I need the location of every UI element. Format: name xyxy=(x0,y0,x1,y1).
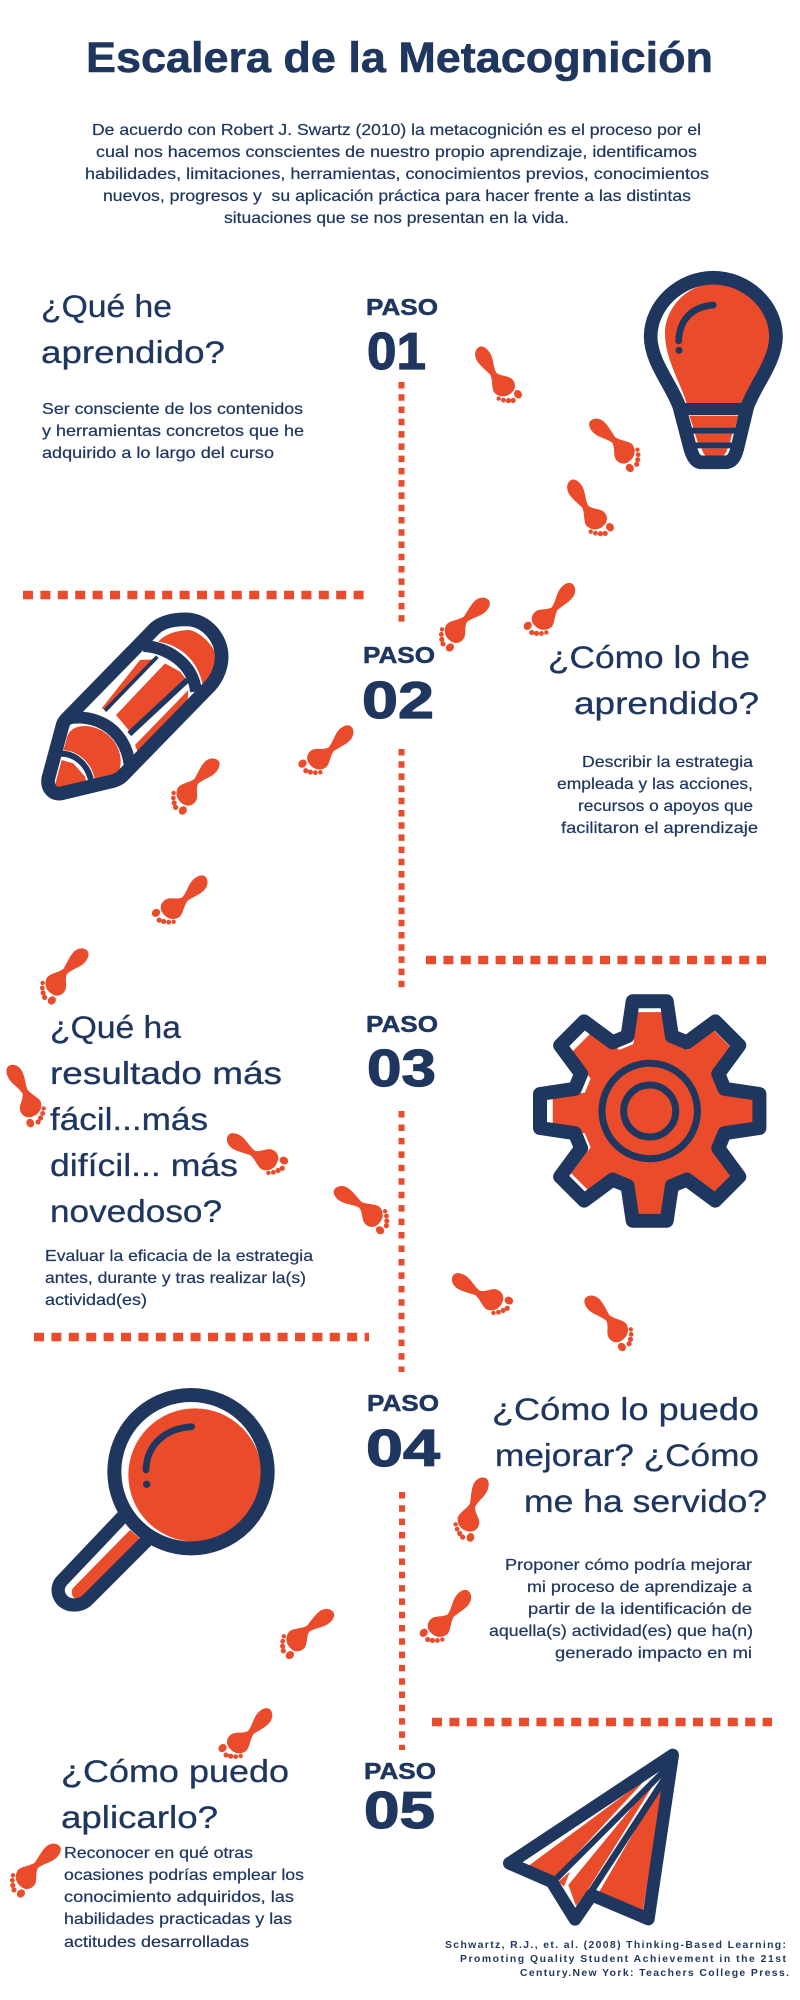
text block: paso 02 description: Describir la estrategia xyxy=(582,754,753,771)
step label 05: PASO xyxy=(364,1758,436,1784)
icon: footprint 4 xyxy=(521,578,584,643)
icon: footprint 15 xyxy=(449,1473,494,1543)
step label 02 xyxy=(362,642,435,730)
intro paragraph: nuevos, progresos y su aplicación práctica para hacer frente a las distintas xyxy=(103,188,691,205)
heading: paso 03 question: resultado más xyxy=(50,1055,282,1091)
panel: paso 04 xyxy=(58,1390,767,1662)
text block: paso 05 description: habilidades practicadas y las xyxy=(64,1911,292,1928)
text block: paso 04 description xyxy=(489,1557,753,1662)
heading: paso 04 question: ¿Cómo lo puedo xyxy=(492,1391,759,1427)
heading: paso 02 question: aprendido? xyxy=(574,685,759,721)
icon: footprint 3 xyxy=(558,475,616,543)
icon: footprint 19 xyxy=(3,1835,66,1900)
text block: paso 02 description xyxy=(557,754,758,837)
panel: paso 03 xyxy=(45,1001,759,1309)
icon: gear xyxy=(540,1001,759,1221)
text block: paso 03 description: actividad(es) xyxy=(45,1292,147,1309)
icon: footprint 18 xyxy=(216,1703,281,1766)
icon: footprint 10 xyxy=(1,1059,51,1129)
heading: paso 03 question: difícil... más xyxy=(50,1147,238,1183)
heading: paso 04 question xyxy=(492,1391,767,1519)
heading: paso 04 question: mejorar? ¿Cómo xyxy=(495,1437,759,1473)
icon: paper plane xyxy=(509,1755,673,1919)
heading: paso 02 question xyxy=(548,639,759,721)
icon: footprint 17 xyxy=(273,1600,339,1661)
heading: paso 03 question: ¿Qué ha xyxy=(50,1009,182,1045)
step label 05: 05 xyxy=(364,1782,435,1840)
step label 04: 04 xyxy=(366,1420,440,1478)
title: Escalera de la Metacognición xyxy=(86,34,713,82)
text block: paso 01 description: adquirido a lo largo del curso xyxy=(42,445,274,462)
step label 01 xyxy=(366,294,438,381)
step label 04 xyxy=(366,1390,440,1478)
intro paragraph: situaciones que se nos presentan en la vida. xyxy=(224,210,569,227)
citation: Century.New York: Teachers College Press. xyxy=(520,1968,789,1979)
step label 03: PASO xyxy=(366,1011,438,1037)
text block: paso 04 description: Proponer cómo podría mejorar xyxy=(505,1557,752,1574)
heading: paso 02 question: ¿Cómo lo he xyxy=(548,639,750,675)
intro paragraph: cual nos hacemos conscientes de nuestro propio aprendizaje, identificamos xyxy=(96,144,697,161)
footprints trail xyxy=(1,342,648,1900)
text block: paso 04 description: aquella(s) actividad(es) que ha(n) xyxy=(489,1623,753,1640)
heading: paso 01 question xyxy=(41,288,225,370)
text block: paso 04 description: mi proceso de aprendizaje a xyxy=(527,1579,752,1596)
step label 03 xyxy=(366,1011,438,1098)
citation xyxy=(445,1940,789,1979)
icon: footprint 6 xyxy=(296,720,362,782)
text block: paso 05 description: Reconocer en qué otras xyxy=(64,1845,253,1862)
citation: Schwartz, R.J., et. al. (2008) Thinking-Based Learning: xyxy=(445,1940,786,1951)
text block: paso 02 description: facilitaron el aprendizaje xyxy=(561,820,758,837)
text block: paso 05 description: conocimiento adquiridos, las xyxy=(64,1889,294,1906)
icon: footprint 8 xyxy=(150,870,215,932)
step label 02: 02 xyxy=(362,672,434,730)
text block: paso 05 description: ocasiones podrías emplear los xyxy=(64,1867,304,1884)
intro paragraph: habilidades, limitaciones, herramientas, conocimientos previos, conocimientos xyxy=(85,166,709,183)
heading: paso 05 question: aplicarlo? xyxy=(61,1799,218,1835)
step label 03: 03 xyxy=(367,1040,436,1098)
step label 02: PASO xyxy=(363,642,435,668)
heading: paso 04 question: me ha servido? xyxy=(524,1483,767,1519)
text block: paso 05 description: actitudes desarrolladas xyxy=(64,1934,249,1951)
citation: Promoting Quality Student Achievement in the 21st xyxy=(460,1954,787,1965)
icon: footprint 11 xyxy=(221,1128,290,1181)
heading: paso 05 question xyxy=(61,1753,289,1835)
step label 01: PASO xyxy=(366,294,438,320)
step label 04: PASO xyxy=(367,1390,439,1416)
text block: paso 02 description: empleada y las acciones, xyxy=(557,776,753,793)
text block: paso 03 description xyxy=(45,1248,313,1309)
step label 05 xyxy=(364,1758,436,1840)
heading: paso 03 question: novedoso? xyxy=(50,1193,222,1229)
icon: pencil xyxy=(48,619,222,794)
heading: paso 01 question: aprendido? xyxy=(41,334,225,370)
icon: footprint 16 xyxy=(417,1585,480,1650)
heading: paso 03 question xyxy=(50,1009,282,1229)
panel: paso 05 xyxy=(61,1753,789,1979)
text block: paso 04 description: generado impacto en mi xyxy=(555,1645,752,1662)
text block: paso 02 description: recursos o apoyos que xyxy=(578,798,753,815)
icon: footprint 13 xyxy=(446,1268,515,1321)
heading: paso 05 question: ¿Cómo puedo xyxy=(61,1753,289,1789)
text block: paso 03 description: antes, durante y tras realizar la(s) xyxy=(45,1270,306,1287)
text block: paso 04 description: partir de la identificación de xyxy=(528,1601,752,1618)
panel: paso 02 xyxy=(48,619,759,837)
icon: light bulb xyxy=(651,278,776,462)
heading: paso 01 question: ¿Qué he xyxy=(41,288,172,324)
text block: paso 05 description xyxy=(64,1845,304,1951)
heading: paso 03 question: fácil...más xyxy=(50,1101,208,1137)
text block: paso 01 description: y herramientas concretos que he xyxy=(42,423,304,440)
panel: paso 01 xyxy=(41,278,776,462)
icon: footprint 1 xyxy=(466,342,524,410)
intro paragraph xyxy=(85,122,709,227)
icon: magnifying glass xyxy=(58,1395,268,1605)
icon: footprint 7 xyxy=(164,751,225,817)
icon: footprint 9 xyxy=(33,941,94,1007)
step label 01: 01 xyxy=(367,323,426,381)
icon: footprint 12 xyxy=(329,1177,396,1236)
text block: paso 01 description: Ser consciente de los contenidos xyxy=(42,401,303,418)
text block: paso 01 description xyxy=(42,401,304,462)
icon: footprint 5 xyxy=(432,589,495,654)
icon: footprint 14 xyxy=(579,1288,641,1353)
intro paragraph: De acuerdo con Robert J. Swartz (2010) la metacognición es el proceso por el xyxy=(92,122,701,139)
icon: footprint 2 xyxy=(584,410,648,474)
text block: paso 03 description: Evaluar la eficacia de la estrategia xyxy=(45,1248,313,1265)
